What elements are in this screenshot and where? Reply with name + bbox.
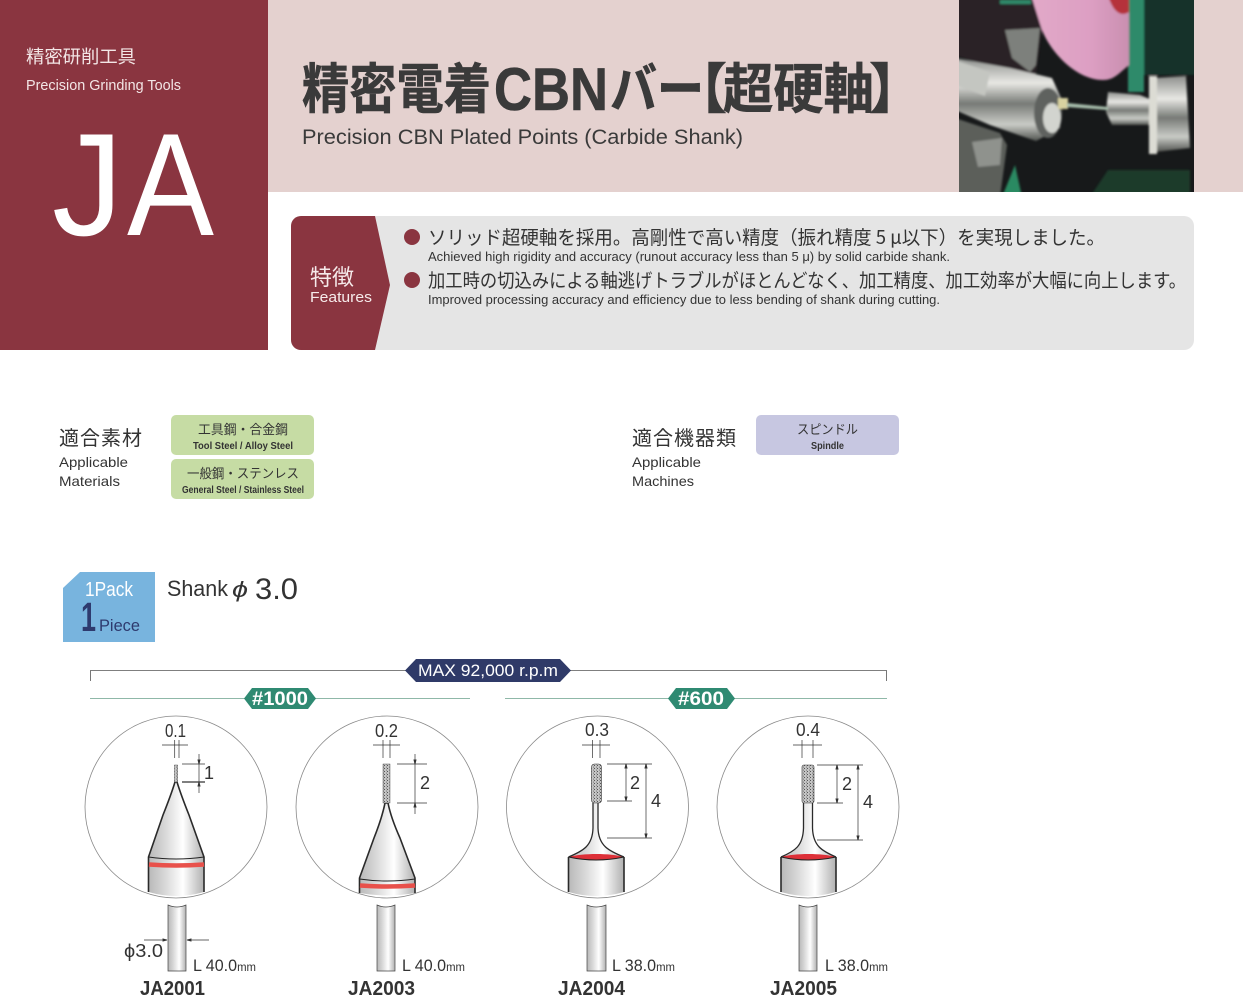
category english: Precision Grinding Tools xyxy=(26,77,181,94)
material tag: general steel xyxy=(171,459,314,499)
tool: JA2004: 0.3 xyxy=(585,720,609,740)
applicable machines: Applicable xyxy=(632,454,701,470)
max rpm bracket xyxy=(90,659,886,682)
photo: grinding wheel and chuck xyxy=(959,0,1194,192)
tool: JA2001: 0.1 xyxy=(165,721,186,741)
material tag: tool steel: Tool Steel / Alloy Steel xyxy=(193,441,293,452)
grit group: #600: #600 xyxy=(678,689,724,710)
feature 1 xyxy=(404,223,1105,264)
applicable machines xyxy=(632,415,899,489)
material tag: tool steel xyxy=(171,415,314,455)
machine tag: spindle: Spindle xyxy=(811,441,844,452)
title: バー xyxy=(610,45,704,124)
pack badge: 1 xyxy=(81,594,96,640)
title: CBN xyxy=(494,56,608,123)
shank size: 3.0 xyxy=(255,573,298,606)
title: 【 xyxy=(673,45,727,124)
tool: JA2004: 2 xyxy=(630,773,640,793)
pack badge xyxy=(63,572,155,642)
pack badge: Piece xyxy=(99,616,140,635)
machine tag: spindle: スピンドル xyxy=(797,419,858,438)
tool: JA2005: L 38.0mm xyxy=(825,956,888,975)
shank size: Shank xyxy=(167,576,229,601)
applicable materials: Applicable xyxy=(59,454,128,470)
tool: JA2001 xyxy=(85,716,267,1000)
tool: JA2001: L 40.0mm xyxy=(193,956,256,975)
applicable materials: Materials xyxy=(59,473,120,489)
tool: JA2004: L 38.0mm xyxy=(612,956,675,975)
pack badge: 1Pack xyxy=(85,579,134,601)
tool: JA2005: 2 xyxy=(842,774,852,794)
panel: features xyxy=(291,216,1194,350)
tool: JA2003 xyxy=(296,716,478,1000)
applicable machines: 適合機器類 xyxy=(632,422,736,451)
feature 2 xyxy=(404,266,1186,307)
feature 2: 加工時の切込みによる軸逃げトラブルがほとんどなく、加工精度、加工効率が大幅に向上します。 xyxy=(428,266,1186,293)
tool: JA2004: 4 xyxy=(651,791,661,811)
feature 1: ソリッド超硬軸を採用。高剛性で高い精度（振れ精度 5 μ以下）を実現しました。 xyxy=(428,223,1105,250)
tool: JA2001: ϕ3.0 xyxy=(124,941,163,961)
category heading: 精密研削工具 xyxy=(26,43,136,69)
applicable materials xyxy=(59,415,314,499)
tool: JA2003: JA2003 xyxy=(348,978,415,1000)
tool: JA2001: JA2001 xyxy=(140,978,205,1000)
title: 超硬軸 xyxy=(723,45,874,124)
features tab xyxy=(291,216,390,350)
title: 精密電着 xyxy=(302,45,491,124)
applicable machines: Machines xyxy=(632,473,694,489)
subtitle: Precision CBN Plated Points (Carbide Shank) xyxy=(302,126,743,149)
feature 2: Improved processing accuracy and efficiency due to less bending of shank during cutting. xyxy=(428,292,940,307)
grit group: #600 xyxy=(505,688,887,710)
tool: JA2003: 0.2 xyxy=(375,721,398,741)
series code: J xyxy=(52,103,123,266)
tool: JA2004 xyxy=(506,716,688,1000)
tool: JA2004: JA2004 xyxy=(558,978,626,1000)
features tab: 特徴 xyxy=(310,260,354,292)
title: 】 xyxy=(869,45,923,124)
grit group: #1000 xyxy=(90,688,470,710)
left maroon panel xyxy=(0,0,268,350)
material tag: tool steel: 工具鋼・合金鋼 xyxy=(198,419,288,438)
feature 1: Achieved high rigidity and accuracy (runout accuracy less than 5 μ) by solid carbide shank. xyxy=(428,249,950,264)
material tag: general steel: General Steel / Stainless Steel xyxy=(182,485,304,496)
grit group: #1000: #1000 xyxy=(252,689,308,710)
tool: JA2003: L 40.0mm xyxy=(402,956,465,975)
tool: JA2003: 2 xyxy=(420,773,430,793)
header band xyxy=(268,0,1243,192)
features tab: Features xyxy=(310,289,372,306)
series code: A xyxy=(127,103,215,266)
tool: JA2005 xyxy=(717,716,899,1000)
tool: JA2005: 4 xyxy=(863,792,873,812)
shank size: ϕ xyxy=(232,577,248,602)
series code xyxy=(52,103,215,266)
applicable materials: 適合素材 xyxy=(59,422,142,451)
shank size xyxy=(167,573,298,606)
max rpm bracket: MAX 92,000 r.p.m xyxy=(418,661,558,680)
tool: JA2001: 1 xyxy=(204,763,214,783)
material tag: general steel: 一般鋼・ステンレス xyxy=(187,463,299,482)
tool: JA2005: JA2005 xyxy=(770,978,837,1000)
machine tag: spindle xyxy=(756,415,899,455)
tool: JA2005: 0.4 xyxy=(796,720,820,740)
title xyxy=(302,45,923,124)
